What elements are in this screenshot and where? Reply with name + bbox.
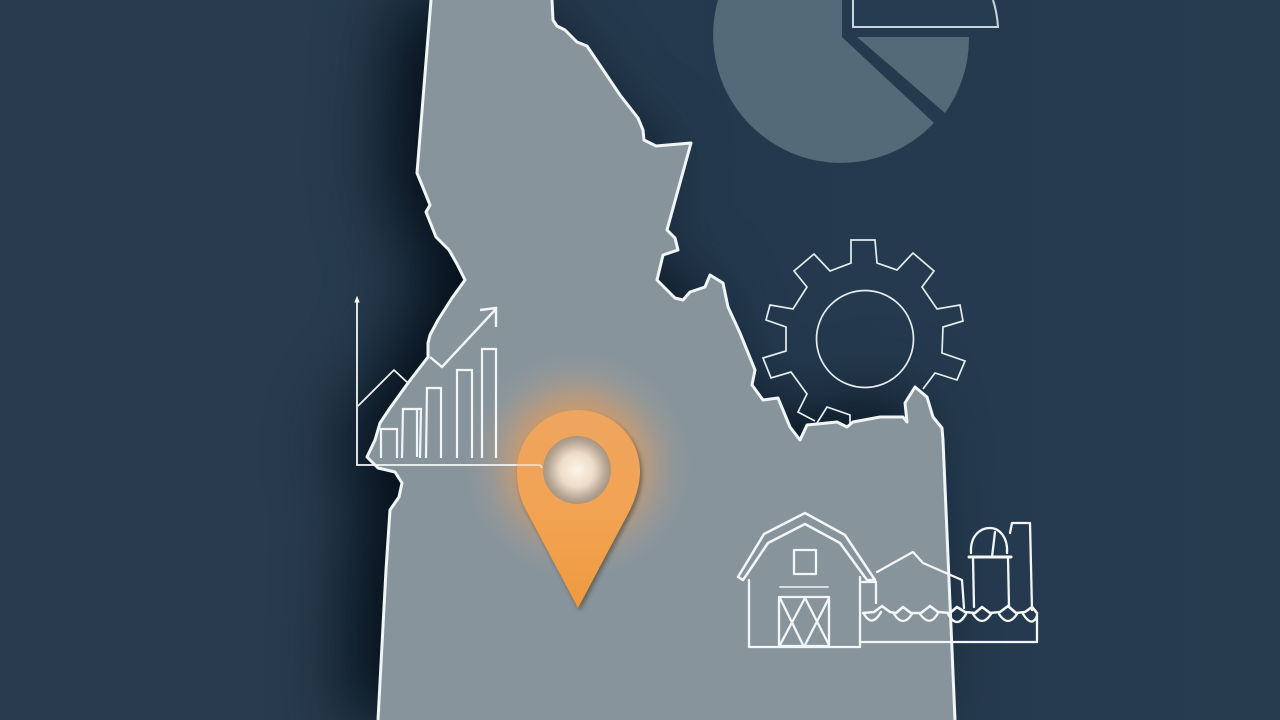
farm: crop row (863, 606, 1037, 613)
chart: trend arrow, left of state (358, 370, 408, 406)
gear: centre ring (816, 290, 914, 388)
chart: axes (357, 298, 542, 468)
farm: barn lintel (780, 586, 828, 588)
pie: outlined slice (853, 0, 998, 27)
growth bar chart (355, 297, 542, 468)
pin: body (517, 410, 640, 608)
pin: shadow (519, 413, 642, 611)
chart: bars (381, 349, 496, 458)
pie chart (713, 0, 998, 163)
chart: trend arrow, on state (430, 308, 496, 367)
state drop shadow (335, 0, 923, 720)
farm: silo band (969, 556, 1011, 558)
farm: round silo (971, 528, 1009, 607)
state: outline (367, 0, 955, 720)
chart: axis arrow (355, 297, 359, 302)
farm: field ground (861, 613, 1037, 642)
pin: connecting line (517, 465, 542, 468)
farm: barn roof (738, 513, 875, 580)
state: fill (367, 0, 955, 720)
farm: barn door (779, 597, 829, 646)
pin glow (456, 343, 700, 587)
farm: shed (862, 552, 964, 608)
farm: barn window (794, 550, 816, 574)
gear: teeth outline (763, 240, 965, 421)
gear: bottom tooth (817, 407, 850, 424)
farm illustration (738, 513, 1037, 647)
farm: barn walls (749, 577, 860, 647)
pie: main slice (713, 0, 934, 163)
state of Idaho map (367, 0, 955, 720)
pie: small slice (857, 37, 969, 113)
gear icon (763, 240, 965, 424)
farm: crop hooks (864, 612, 1037, 622)
farm: tall silo (1010, 523, 1032, 610)
pin: hole (543, 436, 611, 504)
location pin (517, 410, 642, 611)
